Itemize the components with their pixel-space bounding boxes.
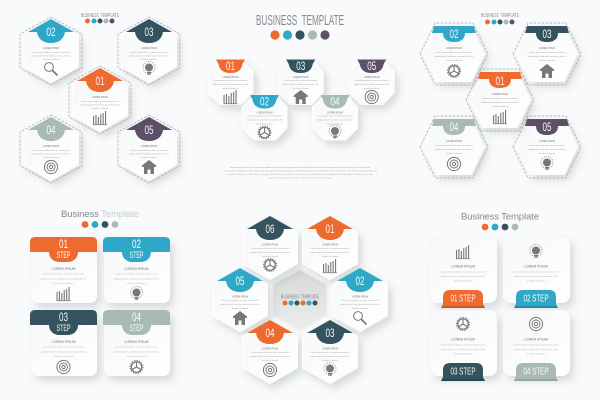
card 02: adipiscing elit sed diam nonummy nibh	[246, 118, 283, 122]
card 03: 03	[542, 29, 552, 41]
card 03: adipiscing elit sed diam nonummy nibh eu	[310, 355, 351, 358]
panel: five flat hexagons	[420, 13, 581, 178]
colour dots	[82, 221, 118, 228]
card 03: Lorem ipsum dolor sit amet consectetur	[284, 79, 318, 82]
card 05: tincidunt ut laoreet	[364, 87, 380, 90]
card 01: LOREM IPSUM	[222, 75, 239, 79]
card 03: tincidunt ut laoreet	[322, 359, 338, 362]
heading: business template: BUSINESS TEMPLATE	[81, 13, 119, 19]
card 02: 02	[450, 29, 458, 41]
card 02: LOREM IPSUM	[124, 266, 148, 271]
card 03: tincidunt ut laoreet	[539, 59, 555, 62]
card 03: adipiscing elit sed diam nonummy nibh	[283, 83, 320, 86]
panel: five octagons	[208, 13, 394, 180]
card 01 step: tincidunt ut laoreet	[454, 280, 472, 282]
card 01: tincidunt ut laoreet	[322, 255, 338, 258]
card 05: Lorem ipsum dolor sit amet consectetur	[221, 299, 259, 302]
card 05	[513, 116, 581, 178]
card 01 step: LOREM IPSUM	[451, 264, 475, 268]
card 05: 05	[367, 61, 376, 73]
card 02: tincidunt ut laoreet	[352, 307, 368, 310]
card 04 step	[503, 310, 570, 381]
card 04: adipiscing elit sed diam nonummy nibh eu	[250, 355, 291, 358]
card 05: tincidunt ut laoreet	[539, 152, 555, 155]
card 04: adipiscing elit sed diam nonummy nibh eu	[435, 148, 474, 151]
card 02 step: LOREM IPSUM	[524, 264, 548, 268]
card 06: tincidunt ut laoreet	[262, 255, 278, 258]
card 03: tincidunt ut laoreet	[141, 58, 157, 61]
card 04: STEP	[130, 323, 144, 334]
card 03: LOREM IPSUM	[293, 75, 309, 79]
card 02	[333, 268, 387, 331]
card 06: Lorem ipsum dolor sit amet consectetur	[251, 247, 289, 250]
card 03: Lorem ipsum dolor sit amet consectetur	[130, 51, 168, 54]
card 05: tincidunt ut laoreet	[232, 307, 248, 310]
card 04	[313, 95, 357, 140]
card 02: adipiscing elit sed diam nonummy nibh eu	[114, 278, 160, 280]
card 03 step: Lorem ipsum dolor sit amet consectetur	[440, 344, 486, 346]
card 01 step	[430, 237, 497, 308]
card 04: adipiscing elit sed diam nonummy nibh	[317, 118, 354, 122]
card 02 step: 02 STEP	[524, 294, 549, 304]
card 04: Lorem ipsum dolor sit amet consectetur	[116, 346, 158, 348]
card 03	[513, 23, 581, 85]
card 05: LOREM IPSUM	[364, 75, 380, 79]
heading: business template: Business Template	[461, 212, 539, 222]
card 04: LOREM IPSUM	[43, 144, 59, 148]
card 03	[279, 60, 323, 104]
card 04 step: 04 STEP	[524, 366, 549, 378]
card 04: adipiscing elit sed diam nonummy nibh eu	[31, 152, 72, 156]
card 02	[103, 237, 170, 303]
card 01: tincidunt ut laoreet	[54, 282, 74, 285]
card 02: Lorem ipsum dolor sit amet consectetur	[116, 272, 158, 276]
card 02: STEP	[130, 250, 144, 261]
card 05: Lorem ipsum dolor sit amet consectetur	[130, 149, 168, 152]
card 03: LOREM IPSUM	[539, 46, 555, 50]
card 01: tincidunt ut laoreet	[492, 105, 508, 108]
heading: business template: Business Template	[61, 209, 139, 220]
card 01: Lorem ipsum dolor sit amet consectetur	[81, 100, 119, 103]
card 02: 02	[132, 239, 141, 251]
card 04	[20, 115, 82, 183]
card 04: LOREM IPSUM	[262, 346, 278, 350]
card 03: 03	[144, 27, 154, 39]
card 01: LOREM IPSUM	[322, 242, 338, 246]
card 03 step: tincidunt ut laoreet	[454, 352, 472, 356]
card 01: adipiscing elit sed diam nonummy nibh	[212, 83, 249, 86]
card 05: adipiscing elit sed diam nonummy nibh eu	[528, 148, 567, 151]
card 05: adipiscing elit sed diam nonummy nibh eu	[129, 152, 170, 156]
card 03: tincidunt ut laoreet	[54, 355, 74, 358]
card 06: 06	[266, 224, 274, 236]
card 04: 04	[132, 312, 141, 324]
card 03: LOREM IPSUM	[141, 46, 157, 50]
card 04: Lorem ipsum dolor sit amet consectetur	[251, 351, 289, 354]
card 01 step: Lorem ipsum dolor sit amet consectetur	[440, 270, 486, 274]
card 02: Lorem ipsum dolor sit amet consectetur	[248, 114, 282, 118]
card 05	[213, 268, 267, 331]
card 05: 05	[542, 122, 552, 134]
paragraph	[223, 166, 378, 180]
card 05: Lorem ipsum dolor sit amet consectetur	[529, 144, 565, 147]
panel: hexagon ring	[213, 216, 387, 383]
card 02: 02	[260, 96, 269, 108]
card 03: Lorem ipsum dolor sit amet consectetur	[529, 51, 565, 54]
card 02: 02	[46, 27, 56, 39]
card 04: Lorem ipsum dolor sit amet consectetur	[32, 149, 70, 152]
card 01: Lorem ipsum dolor sit amet consectetur	[311, 247, 349, 250]
card 03: tincidunt ut laoreet	[293, 87, 309, 90]
card 02: LOREM IPSUM	[256, 110, 273, 114]
heading: business template: BUSINESS TEMPLATE	[481, 13, 519, 19]
card 05: adipiscing elit sed diam nonummy nibh eu	[220, 303, 261, 306]
card 03: 03	[59, 312, 68, 324]
panel: five pointed hexagons	[20, 13, 180, 183]
card 01: LOREM IPSUM	[52, 266, 76, 271]
card 03 step: 03 STEP	[450, 366, 476, 378]
card 03 step	[430, 310, 497, 381]
card 03: 03	[326, 328, 334, 340]
card 01: 01	[96, 76, 104, 88]
card 06: adipiscing elit sed diam nonummy nibh eu	[250, 251, 291, 254]
card 03: LOREM IPSUM	[52, 339, 76, 344]
card 01: tincidunt ut laoreet	[222, 87, 239, 90]
card 02: tincidunt ut laoreet	[446, 59, 462, 62]
card 05	[118, 115, 180, 183]
card 01: STEP	[56, 250, 70, 261]
card 01: adipiscing elit sed diam nonummy nibh eu	[310, 251, 351, 254]
paragraph: Lorem ipsum dolor sit amet, consectetuer adipiscing elit, sed diam nonummy nibh euismod tincidunt ut laoreet dolore magna aliquam erat volutpat. Ut wisi enim ad minim	[230, 166, 370, 169]
card 04	[420, 116, 488, 178]
card 02: tincidunt ut laoreet	[256, 122, 273, 126]
card 02: tincidunt ut laoreet	[43, 58, 59, 61]
paragraph: dolore te feugait nulla facilisi. Nam liber tempor cum soluta	[269, 176, 332, 180]
card 02: LOREM IPSUM	[352, 294, 368, 298]
card 04 step: adipiscing elit sed diam nonummy nibh	[514, 348, 559, 351]
card 04: 04	[330, 96, 340, 108]
card 02 step: tincidunt ut laoreet	[527, 280, 545, 282]
card 02: LOREM IPSUM	[446, 46, 462, 50]
card 04	[243, 320, 297, 383]
centre hexagon	[272, 269, 328, 331]
card 05: LOREM IPSUM	[232, 294, 248, 298]
card 05: adipiscing elit sed diam nonummy nibh	[354, 83, 391, 86]
card 03	[30, 310, 97, 376]
card 01: LOREM IPSUM	[492, 92, 508, 96]
card 04: 04	[266, 328, 275, 340]
card 05: Lorem ipsum dolor sit amet consectetur	[355, 79, 389, 82]
paragraph: veniam, quis nostrud exerci tation ullamcorper suscipit lobortis nisl ut aliquip ex ea commodo consequat. Duis autem vel eum iriure dolor in hendrerit in vulputate velit esse	[223, 170, 378, 172]
paragraph: molestie consequat, vel illum dolore eu feugiat nulla facilisis at vero eros et accumsan et iusto odio dignissim qui blandit praesent luptatum zzril delenit augue duis	[227, 173, 373, 176]
card 01: adipiscing elit sed diam nonummy nibh eu	[481, 101, 520, 104]
card 04: Lorem ipsum dolor sit amet consectetur	[318, 114, 352, 118]
card 02: adipiscing elit sed diam nonummy nibh eu	[340, 303, 381, 306]
card 02: adipiscing elit sed diam nonummy nibh eu	[31, 54, 72, 58]
colour dots	[85, 18, 114, 24]
card 01	[303, 216, 357, 279]
card 01	[466, 69, 534, 131]
card 01	[69, 66, 131, 134]
card 01: 01	[326, 224, 334, 236]
card 05: tincidunt ut laoreet	[141, 156, 157, 159]
card 04: LOREM IPSUM	[124, 339, 148, 344]
card 03: 03	[296, 61, 305, 73]
card 06	[243, 216, 297, 279]
card 01: adipiscing elit sed diam nonummy nibh eu	[40, 278, 87, 280]
colour dots	[485, 20, 514, 24]
card 04: LOREM IPSUM	[446, 139, 462, 143]
card 01: tincidunt ut laoreet	[92, 107, 108, 110]
card 02: Lorem ipsum dolor sit amet consectetur	[341, 299, 379, 302]
card 04: tincidunt ut laoreet	[446, 152, 462, 155]
card 03	[303, 320, 357, 383]
card 05: 05	[144, 125, 154, 137]
card 01 step: adipiscing elit sed diam nonummy nibh	[441, 275, 486, 278]
card 01	[30, 237, 97, 303]
card 02 step: Lorem ipsum dolor sit amet consectetur	[513, 270, 559, 274]
card 04: tincidunt ut laoreet	[262, 359, 278, 362]
card 01: 01	[59, 239, 68, 251]
card 04 step: tincidunt ut laoreet	[527, 352, 545, 356]
card 04: LOREM IPSUM	[327, 110, 343, 114]
card 02: tincidunt ut laoreet	[126, 282, 147, 285]
card 03: Lorem ipsum dolor sit amet consectetur	[42, 346, 85, 348]
card 01: adipiscing elit sed diam nonummy nibh eu	[80, 104, 121, 106]
panel: four tab cards	[430, 212, 570, 381]
card 03: LOREM IPSUM	[322, 346, 338, 350]
colour dots	[482, 224, 518, 230]
card 01: Lorem ipsum dolor sit amet consectetur	[214, 79, 248, 82]
card 04: tincidunt ut laoreet	[43, 156, 59, 159]
card 05: LOREM IPSUM	[539, 139, 555, 143]
heading: business template: BUSINESS TEMPLATE	[256, 13, 344, 29]
card 02: Lorem ipsum dolor sit amet consectetur	[32, 51, 70, 54]
card 03: adipiscing elit sed diam nonummy nibh eu	[528, 55, 567, 58]
card 03 step: adipiscing elit sed diam nonummy nibh	[441, 348, 486, 351]
card 04	[103, 310, 170, 376]
card 02	[20, 17, 82, 85]
card 01: Lorem ipsum dolor sit amet consectetur	[42, 272, 85, 276]
card 03 step: LOREM IPSUM	[451, 336, 475, 342]
card 01: Lorem ipsum dolor sit amet consectetur	[482, 97, 518, 100]
card 03: Lorem ipsum dolor sit amet consectetur	[311, 351, 349, 354]
card 02	[420, 23, 488, 85]
card 03: adipiscing elit sed diam nonummy nibh eu	[129, 54, 170, 58]
card 02: Lorem ipsum dolor sit amet consectetur	[436, 51, 472, 54]
card 02	[242, 95, 286, 140]
card 04: tincidunt ut laoreet	[327, 122, 343, 126]
card 04: adipiscing elit sed diam nonummy nibh eu	[114, 350, 160, 354]
card 04: Lorem ipsum dolor sit amet consectetur	[436, 144, 472, 147]
card 03: STEP	[56, 323, 70, 334]
card 05	[350, 60, 394, 104]
card 04: 04	[46, 125, 56, 137]
card 01	[208, 60, 252, 104]
card 04: tincidunt ut laoreet	[126, 355, 147, 358]
card 02 step	[503, 237, 570, 308]
card 01: LOREM IPSUM	[92, 95, 108, 99]
card 04: 04	[450, 122, 459, 134]
card 06: LOREM IPSUM	[262, 242, 278, 246]
card 02: 02	[356, 276, 364, 288]
colour dots	[270, 30, 330, 40]
card 04 step: Lorem ipsum dolor sit amet consectetur	[513, 344, 559, 346]
card 01 step: 01 STEP	[450, 294, 476, 304]
card 01: 01	[496, 76, 504, 88]
card 02 step: adipiscing elit sed diam nonummy nibh	[514, 275, 559, 278]
card 05: 05	[236, 276, 244, 288]
card 03: adipiscing elit sed diam nonummy nibh eu	[40, 350, 87, 354]
card 05: LOREM IPSUM	[141, 144, 157, 148]
panel: four header cards	[30, 209, 170, 376]
card 02: adipiscing elit sed diam nonummy nibh eu	[435, 55, 474, 58]
card 02: LOREM IPSUM	[43, 46, 59, 50]
card 04 step: LOREM IPSUM	[524, 336, 548, 342]
card 01: 01	[226, 61, 235, 73]
centre hexagon: BUSINESS TEMPLATE	[281, 294, 319, 300]
card 03	[118, 17, 180, 85]
